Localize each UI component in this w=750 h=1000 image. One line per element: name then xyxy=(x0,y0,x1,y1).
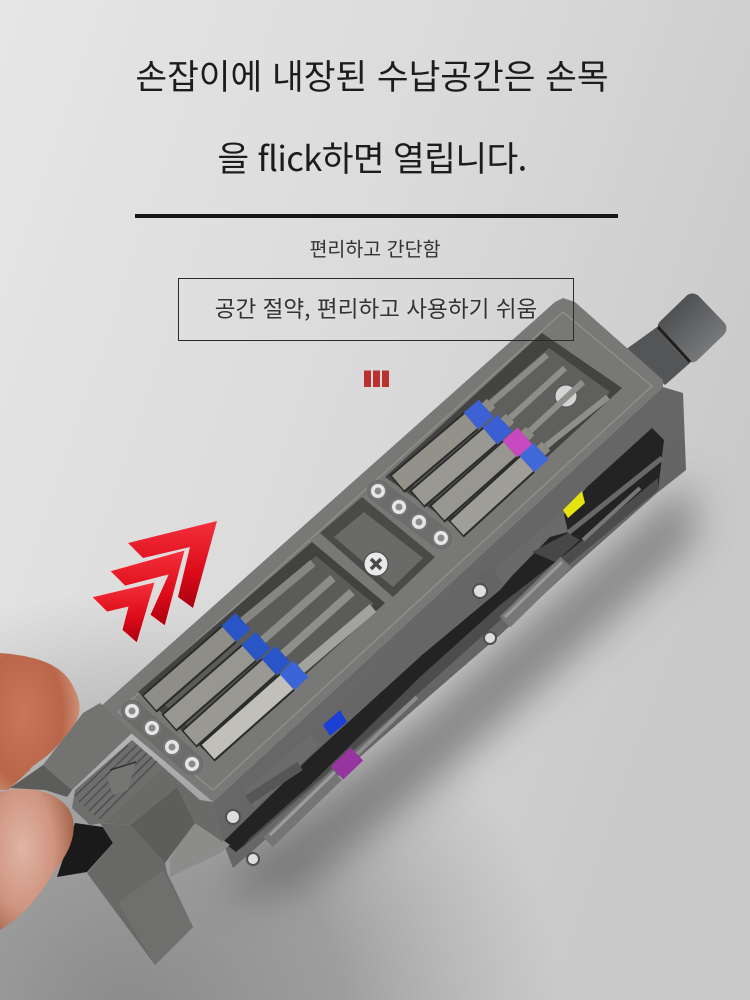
bit 7 xyxy=(189,592,352,739)
icon: three red bars xyxy=(364,370,389,387)
title line 1: 손잡이에 내장된 수납공간은 손목 xyxy=(135,49,609,99)
screwdriver tool xyxy=(0,290,730,965)
hand: upper finger xyxy=(0,653,80,790)
bit 8 xyxy=(207,608,373,753)
heading rule xyxy=(135,214,618,218)
flick latch xyxy=(72,740,163,825)
lower bit tray xyxy=(138,542,385,758)
bit 6 xyxy=(169,578,333,723)
handle knob xyxy=(625,290,730,385)
torx screws lower row xyxy=(124,703,200,772)
subtitle: 편리하고 간단함 xyxy=(309,233,441,262)
side compartment contents xyxy=(226,458,662,865)
icon: red arrows xyxy=(92,521,217,643)
bit 5 xyxy=(149,563,313,704)
hand: lower finger xyxy=(0,789,74,930)
center screw tray xyxy=(320,497,435,597)
title line 2: 을 flick하면 열립니다. xyxy=(217,131,527,181)
end block xyxy=(57,767,230,965)
upper bit tray xyxy=(385,333,622,533)
bit 4 xyxy=(456,397,608,529)
head block xyxy=(10,703,132,797)
bit 3 xyxy=(437,382,583,514)
bit 2 xyxy=(417,368,565,499)
side face xyxy=(213,387,686,868)
body top face xyxy=(100,298,663,802)
side storage cavity xyxy=(223,428,664,852)
boxed caption: 공간 절약, 편리하고 사용하기 쉬움 xyxy=(215,291,537,324)
bit 1 xyxy=(397,355,547,484)
torx screws upper row xyxy=(370,483,449,546)
boxed caption xyxy=(178,278,574,341)
